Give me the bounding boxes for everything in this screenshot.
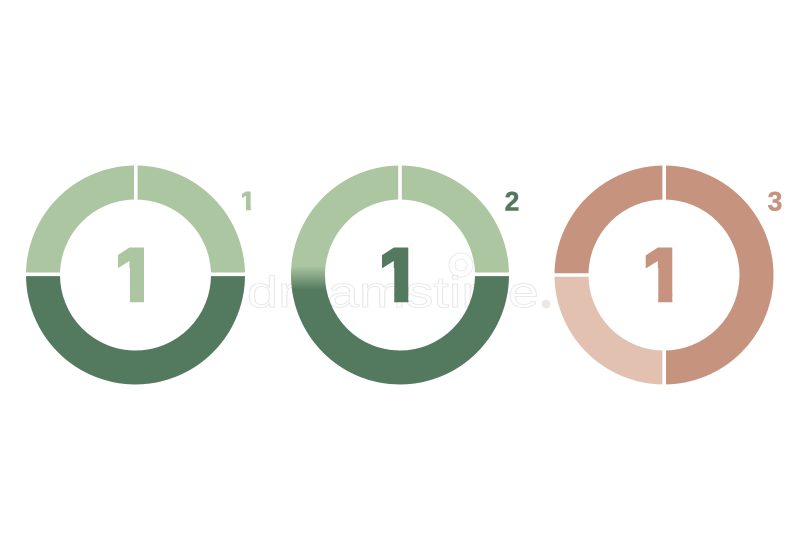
segment: bottom left: [572, 275, 664, 368]
donut chart 2: [308, 160, 514, 368]
watermark: [247, 253, 550, 317]
donut chart 1: [22, 160, 250, 368]
center number 1: 1: [113, 231, 157, 319]
center number 1: 1: [378, 231, 421, 319]
donut chart 3: [550, 160, 757, 390]
segment gaps: [22, 160, 250, 274]
segment: bottom half: [43, 275, 228, 368]
watermark: dreamstime: [247, 268, 539, 317]
segment: gradient left half: [308, 182, 400, 368]
label 2: 2: [505, 186, 519, 216]
segment: top right: [136, 182, 228, 275]
segment: top left: [43, 182, 136, 275]
segment: top right: [400, 182, 492, 275]
label 3: 3: [768, 186, 782, 216]
segment: top left: [572, 182, 664, 275]
segment gaps: [400, 160, 514, 274]
segment: bottom right: [400, 275, 492, 368]
segment gaps: [550, 160, 664, 390]
center number 1: 1: [642, 231, 685, 319]
infographic canvas: [26, 166, 782, 384]
segment: right half: [664, 182, 757, 368]
label 1: 1: [240, 186, 255, 216]
